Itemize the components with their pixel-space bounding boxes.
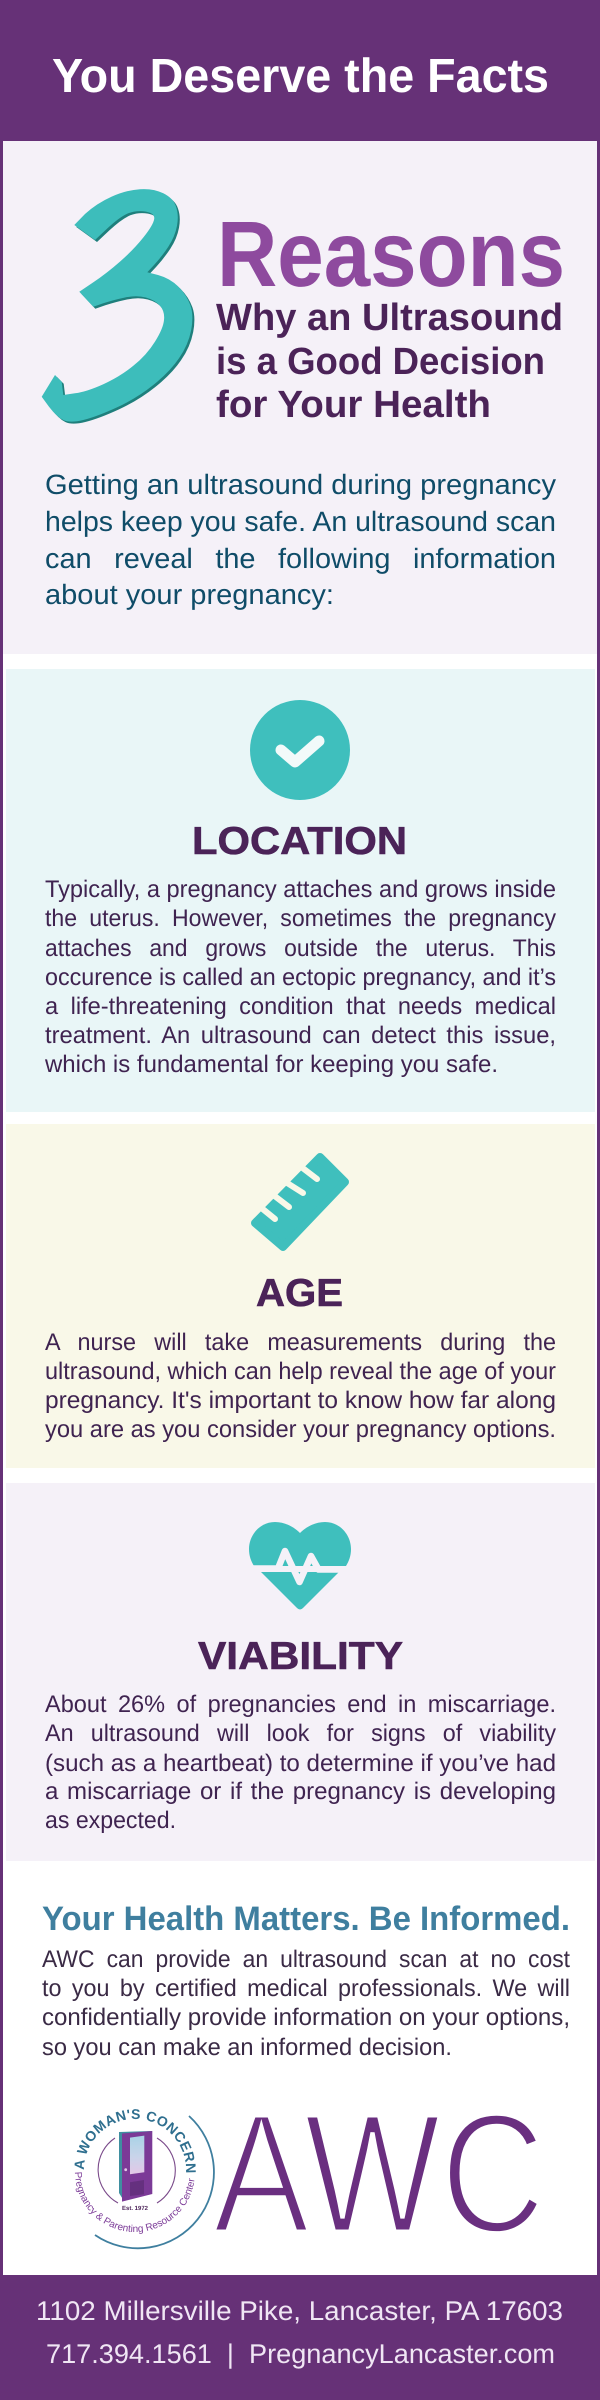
- text: phone and website: 717.394.1561 | PregnancyLancaster.com: [46, 2339, 555, 2369]
- text block: AWC paragraph: so you can make an informed decision.: [42, 2034, 452, 2061]
- heading: your health matters: Your Health Matters. Be Informed.: [42, 1900, 570, 1938]
- text block: viability paragraph: [45, 1691, 556, 1834]
- icon: hand-drawn number 3: [42, 189, 194, 424]
- text block: location paragraph: occurence is called an ectopic pregnancy, and it’s: [45, 964, 556, 991]
- text block: AWC paragraph: confidentially provide information on your options,: [42, 2004, 570, 2031]
- icon: ruler: [255, 1157, 345, 1247]
- text block: location paragraph: which is fundamental for keeping you safe.: [44, 1051, 498, 1078]
- text block: viability paragraph: About 26% of pregnancies end in miscarriage.: [45, 1691, 556, 1718]
- icon: check mark circle: [250, 700, 350, 800]
- text block: age paragraph: A nurse will take measurements during the: [45, 1329, 556, 1356]
- text: address: 1102 Millersville Pike, Lancaster, PA 17603: [36, 2296, 563, 2326]
- logo: A Woman's Concern badge: A WOMAN'S CONCERN: [74, 2109, 196, 2172]
- text block: location paragraph: [44, 876, 556, 1078]
- text block: viability paragraph: as expected.: [45, 1807, 176, 1834]
- text block: intro paragraph: can reveal the following information: [45, 543, 556, 574]
- logo: A Woman's Concern badge: Pregnancy & Parenting Resource Center: [74, 2172, 194, 2234]
- text block: age paragraph: you are as you consider your pregnancy options.: [45, 1416, 556, 1443]
- text block: intro paragraph: helps keep you safe. An ultrasound scan: [45, 506, 556, 537]
- text block: location paragraph: Typically, a pregnancy attaches and grows inside: [45, 876, 556, 903]
- panel: call to action: [42, 1900, 570, 2269]
- logo: AWC wordmark: AWC: [213, 2079, 545, 2269]
- panel: intro: [3, 141, 597, 654]
- logo: A Woman's Concern badge: Est. 1972: [122, 2205, 149, 2212]
- heading: viability: VIABILITY: [198, 1635, 403, 1678]
- icon: heart with pulse: [249, 1522, 351, 1610]
- panel: age: [6, 1124, 595, 1468]
- heading: why an ultrasound is a good decision: is a Good Decision: [216, 341, 545, 383]
- heading: why an ultrasound is a good decision: for Your Health: [216, 384, 491, 426]
- panel: header: [0, 0, 600, 141]
- text block: viability paragraph: (such as a heartbeat) to determine if you’ve had: [45, 1750, 556, 1777]
- text block: age paragraph: [45, 1329, 556, 1443]
- text block: age paragraph: pregnancy. It's important to know how far along: [45, 1387, 556, 1414]
- heading: location: LOCATION: [192, 820, 407, 863]
- text block: viability paragraph: An ultrasound will look for signs of viability: [45, 1720, 556, 1747]
- heading: age: AGE: [256, 1272, 343, 1315]
- text block: viability paragraph: a miscarriage or if the pregnancy is developing: [45, 1778, 556, 1805]
- text block: AWC paragraph: [42, 1946, 570, 2061]
- text block: location paragraph: a life-threatening condition that needs medical: [45, 993, 556, 1020]
- text block: location paragraph: attaches and grows outside the uterus. This: [45, 935, 556, 962]
- heading: why an ultrasound is a good decision: [216, 297, 563, 426]
- text block: location paragraph: treatment. An ultrasound can detect this issue,: [45, 1022, 556, 1049]
- text block: intro paragraph: Getting an ultrasound during pregnancy: [45, 469, 556, 500]
- text block: age paragraph: ultrasound, which can help reveal the age of your: [45, 1358, 556, 1385]
- heading: why an ultrasound is a good decision: Why an Ultrasound: [216, 297, 563, 339]
- text block: intro paragraph: [45, 469, 556, 610]
- title: You Deserve the Facts: [52, 50, 549, 103]
- panel: location: [6, 669, 595, 1112]
- text block: intro paragraph: about your pregnancy:: [45, 579, 334, 610]
- heading: Reasons: Reasons: [217, 202, 565, 306]
- panel: footer: [0, 2275, 600, 2400]
- logo: A Woman's Concern badge: [74, 2109, 215, 2250]
- text block: AWC paragraph: to you by certified medical professionals. We will: [42, 1975, 570, 2002]
- panel: viability: [6, 1483, 595, 1861]
- text block: AWC paragraph: AWC can provide an ultrasound scan at no cost: [42, 1946, 570, 1973]
- text block: location paragraph: the uterus. However, sometimes the pregnancy: [45, 905, 556, 932]
